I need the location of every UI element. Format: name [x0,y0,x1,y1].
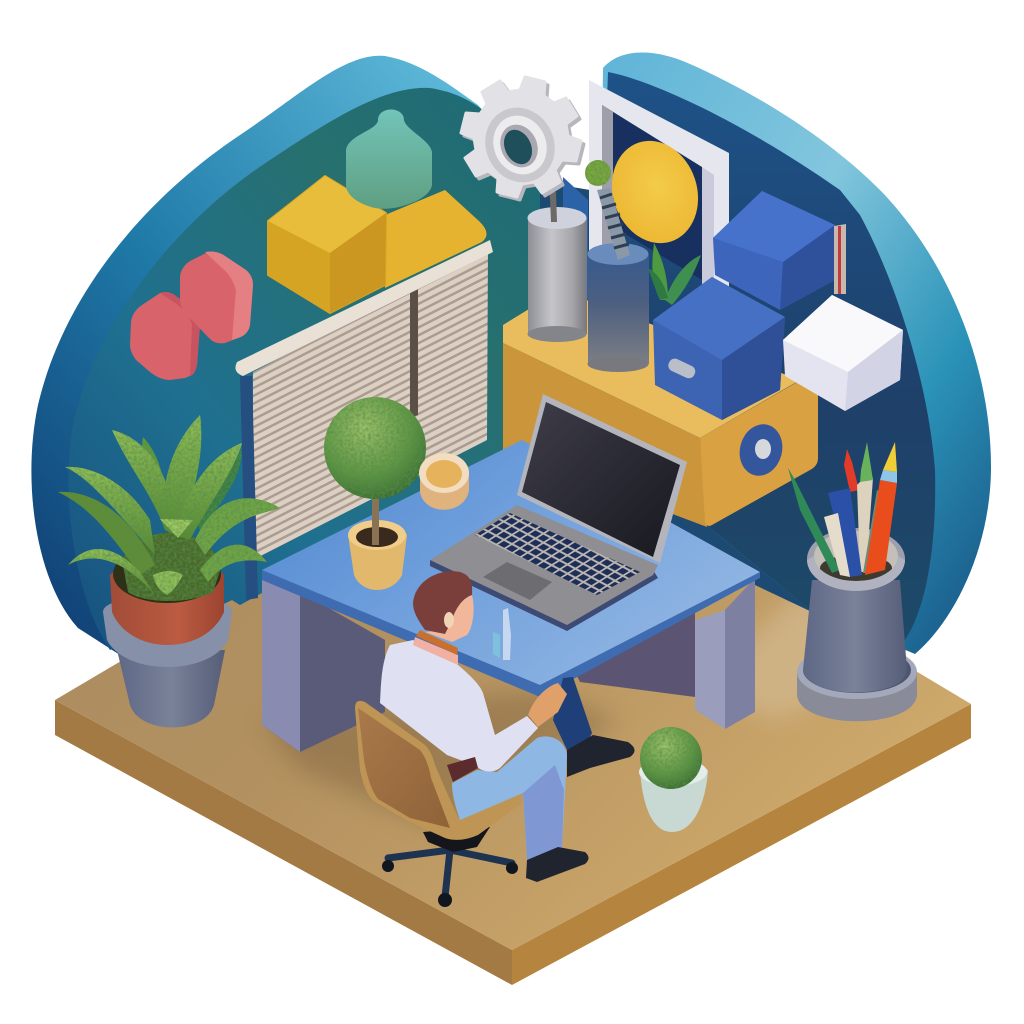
icon: gear [461,77,584,200]
rim front [807,556,905,591]
icon: bonsai in yellow pot [324,397,426,590]
icon: red blocks [130,252,253,380]
belt [447,757,478,782]
desk top [262,440,760,697]
icon: cup [419,453,469,510]
panel: desk [262,440,760,752]
terracotta pot [110,545,224,645]
floor slab [55,430,971,985]
fern leaves [58,415,280,601]
icon: blue cubes [653,191,903,420]
holder body [803,580,907,692]
head [413,571,474,642]
hand [528,683,567,727]
shoes [526,735,635,882]
rim back [807,528,905,590]
icon: metal cylinders with plant [528,160,649,372]
shirt [380,640,538,772]
icon: striped books [834,224,846,294]
icon: large potted fern [58,415,280,728]
icon: glasses on the desk [493,608,511,660]
icon: white cube [783,295,903,411]
trousers [452,677,592,860]
collar [413,630,458,665]
icon: yellow shelf blocks and teal vase [268,110,487,313]
icon: office chair [355,701,522,907]
icon: small potted plant [639,727,708,832]
panel: right curved wall [600,52,991,654]
icon: gold cabinet [503,290,818,527]
panel: seated person [380,571,635,882]
icon: pencil cup [788,442,917,721]
base ring [797,645,917,721]
icon: laptop [430,394,687,631]
panel: window blinds [235,240,493,600]
grey planter [103,596,232,728]
pencils [788,442,897,577]
icon: cabinet lock [734,419,788,481]
icon: picture frame [589,80,729,300]
desk legs [262,570,755,752]
icon: small plant behind the cabinet [648,243,701,305]
icon: yellow disc [599,130,711,254]
wall backing behind the cabinet [520,180,812,612]
panel: left curved wall [31,56,540,655]
